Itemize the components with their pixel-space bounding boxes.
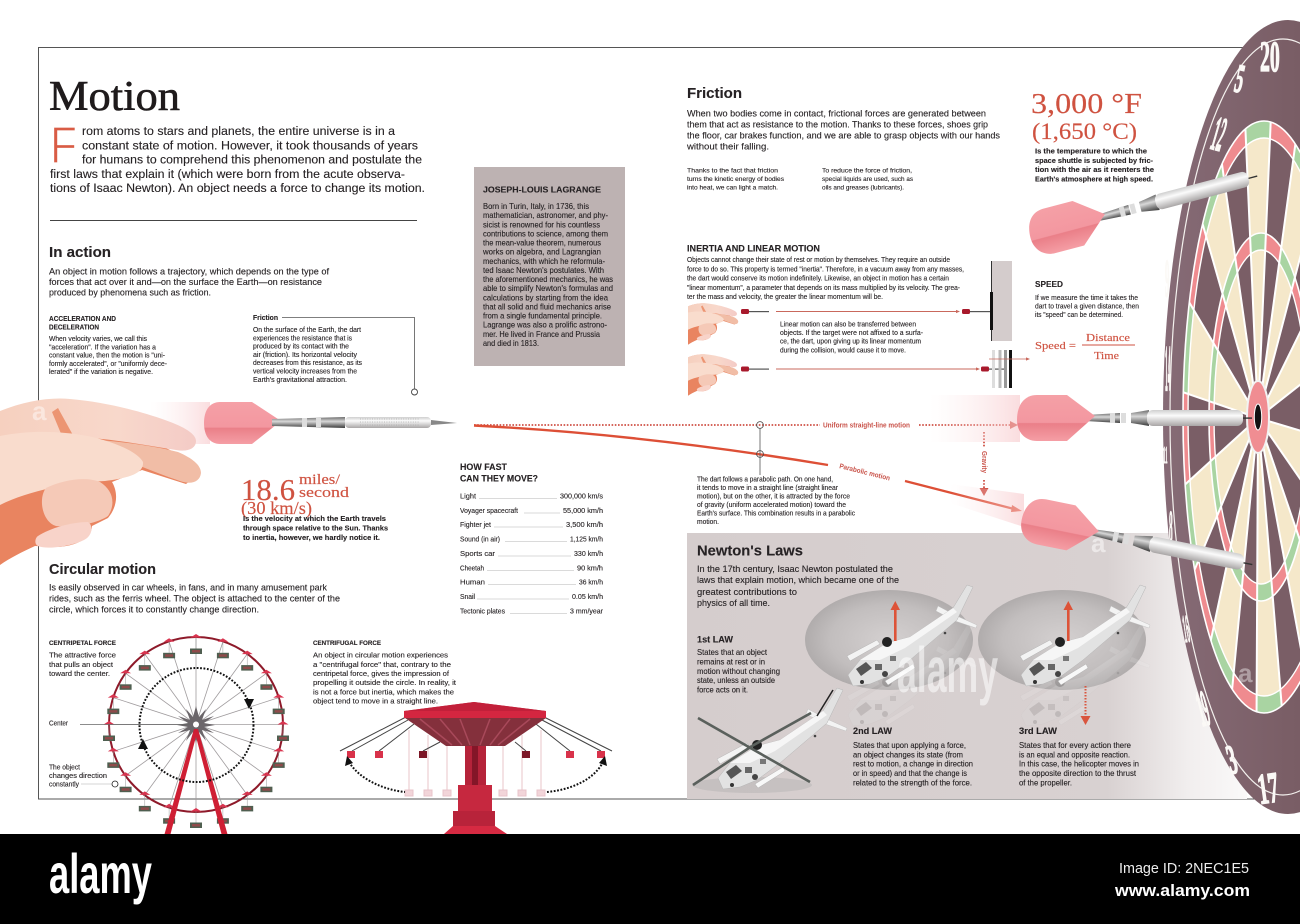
helicopter 1st law [692, 688, 847, 793]
block: acceleration: ACCELERATION AND [49, 316, 116, 323]
block: speed: If we measure the time it takes the [1035, 293, 1138, 302]
text: linear motion transfer: during the collision, would cause it to move. [780, 346, 906, 354]
3rd law text: States that for every action there [1019, 741, 1132, 750]
board numbers: 3 [1222, 736, 1241, 783]
block: friction callout: Friction [253, 315, 278, 322]
text: parabolic explanation: motion. [697, 517, 719, 526]
section: Inertia and linear motion: "linear momentum", a parameter that depends on its mass multiplied by its velocity. The grea- [687, 283, 960, 292]
leader line [282, 318, 414, 388]
wires [1184, 122, 1300, 712]
section: Friction: When two bodies come in contact, frictional forces are generated between [687, 108, 986, 120]
text: parabolic explanation: The dart follows a parabolic path. On one hand, [697, 474, 833, 484]
stat: Earth's velocity: second [299, 485, 350, 501]
stat: temperature: Is the temperature to which the [1035, 146, 1147, 156]
board numbers: 11 [1163, 441, 1168, 469]
text: centrifugal force: a "centrifugal force" that, contrary to the [313, 660, 451, 669]
block: friction callout: decreases from this resistance, as its [253, 358, 362, 367]
arrow: gravity [980, 432, 988, 496]
swing ride [340, 702, 612, 834]
panel: Joseph-Louis Lagrange: Born in Turin, Italy, in 1736, this [483, 202, 589, 211]
text: In action: An object in motion follows a trajectory, which depends on the type of [49, 266, 329, 278]
text: parabolic explanation: motion), but on the other, it is attracted by the force [697, 492, 850, 500]
panel: Newton's Laws [687, 533, 1247, 799]
label: object changes direction [49, 764, 118, 788]
panel: Joseph-Louis Lagrange: able to simplify Newton's formulas and [483, 284, 613, 293]
diagram: fixed target [688, 261, 1012, 345]
table: how fast can they move: 300,000 km/s [560, 492, 603, 500]
intro text: In the 17th century, Isaac Newton postulated the [697, 564, 893, 575]
panel: Joseph-Louis Lagrange: from a single fundamental principle. [483, 312, 602, 321]
text: centripetal force [49, 640, 117, 678]
stat: Earth's velocity: to inertia, however, we hardly notice it. [243, 533, 380, 542]
friction notes: turns the kinetic energy of bodies [687, 176, 785, 183]
1st law text: force acts on it. [697, 686, 748, 694]
stat: Earth's velocity: Is the velocity at which the Earth travels [243, 514, 386, 523]
section: Inertia and linear motion: force to do so. This property is termed "inertia". Therefore, in a vacuum away from any masses, [687, 264, 964, 274]
3rd law text: In this case, the helicopter moves in [1019, 760, 1139, 768]
panel: Joseph-Louis Lagrange: calculations by starting from the idea [483, 293, 609, 302]
cone under canopy [405, 718, 546, 746]
panel: Joseph-Louis Lagrange: mechanics, with which he reformula- [483, 257, 605, 266]
block: friction callout: vertical velocity increases from the [253, 366, 357, 376]
text: linear motion transfer: ce, the dart, upon giving up its linear momentum [780, 337, 921, 346]
friction notes: To reduce the force of friction, [822, 168, 912, 174]
2nd law text: or in speed) and that the change is [853, 769, 967, 778]
left dart with motion trail [150, 402, 457, 444]
block: speed: dart to travel a given distance, then [1035, 302, 1139, 310]
3rd law text: is an equal and opposite reaction. [1019, 750, 1130, 760]
alamy logo: alamy [49, 842, 152, 905]
stat: temperature [1031, 88, 1154, 184]
table: how fast can they move: CAN THEY MOVE? [460, 474, 538, 484]
watermark [32, 396, 1253, 706]
block: friction callout: produced by its contact with the [253, 342, 349, 351]
2nd law text [853, 726, 973, 788]
board numbers: 20 [1260, 34, 1280, 81]
text: centripetal force: CENTRIPETAL FORCE [49, 640, 117, 647]
table: how fast can they move: Sound (in air) [460, 534, 500, 544]
intro paragraph with drop cap: constant state of motion. However, it took thousands of years [82, 138, 418, 152]
website: www.alamy.com [1114, 881, 1250, 900]
block: friction callout: On the surface of the Earth, the dart [253, 325, 361, 334]
panel: Joseph-Louis Lagrange: sicist is renowned for his countless [483, 220, 600, 229]
table: how fast can they move: Fighter jet [460, 520, 491, 529]
motion trajectories [474, 421, 1022, 512]
block: speed: SPEED [1035, 279, 1063, 289]
section: Inertia and linear motion: Objects cannot change their state of rest or motion by themselves. They require an outside [687, 255, 950, 264]
block: friction callout: Earth's gravitational attraction. [253, 375, 347, 384]
stat: temperature: Earth's atmosphere at high speed. [1035, 174, 1153, 184]
board numbers: 5 [1231, 56, 1248, 102]
1st law text: motion without changing [697, 667, 780, 676]
board numbers: 12 [1206, 107, 1232, 162]
label: object changes direction: changes direction [49, 773, 107, 780]
stat: Earth's velocity: miles/ [299, 472, 341, 488]
intro paragraph with drop cap [50, 117, 425, 195]
formula: speed [1035, 332, 1135, 362]
label: center: Center [49, 720, 69, 728]
intro text: greatest contributions to [697, 587, 797, 598]
intro paragraph with drop cap: rom atoms to stars and planets, the entire universe is in a [82, 124, 395, 138]
block: friction callout: air (friction). Its horizontal velocity [253, 350, 357, 359]
rim [109, 637, 283, 812]
2nd law text: rest to motion, a change in direction [853, 760, 973, 768]
stat: Earth's velocity: through space relative to the Sun. Thanks [243, 524, 388, 532]
watermark: alamy [897, 634, 998, 706]
3rd law text: of the propeller. [1019, 778, 1072, 788]
friction notes: special liquids are used, such as [822, 176, 914, 183]
intro paragraph with drop cap: first laws that explain it (which were born from the acute observa- [50, 167, 405, 181]
text: parabolic explanation: of gravity (uniform accelerated motion) toward the [697, 500, 846, 509]
table: how fast can they move: Voyager spacecraft [460, 506, 518, 515]
panel: Joseph-Louis Lagrange [474, 167, 625, 366]
intro text: physics of all time. [697, 598, 770, 609]
board numbers: 9 [1165, 250, 1169, 309]
panel: Joseph-Louis Lagrange: mer. He lived in France and Prussia [483, 330, 600, 339]
1st law text: States that an object [697, 648, 768, 657]
stat: temperature: tion with the air as it reenters the [1035, 165, 1154, 174]
table: how fast can they move: 55,000 km/h [563, 506, 603, 515]
intro text: laws that explain motion, which became one of the [697, 575, 899, 586]
section: Friction: without their falling. [686, 142, 769, 152]
table: how fast can they move: 0.05 km/h [572, 592, 603, 601]
block: speed [1035, 279, 1139, 362]
seats [347, 751, 605, 758]
arrow: thrust up [1064, 601, 1073, 641]
helicopter 2nd law [805, 585, 977, 726]
text: centrifugal force: is not a force but inertia, which makes the [313, 688, 454, 696]
stat: temperature: (1,650 °C) [1032, 119, 1137, 144]
parabolic line [474, 426, 828, 465]
section: Inertia and linear motion: ter the mass and velocity, the greater the linear momentum will be. [687, 292, 883, 301]
section: Inertia and linear motion: INERTIA AND LINEAR MOTION [687, 244, 820, 254]
friction notes: oils and greases (lubricants). [822, 184, 904, 192]
block: acceleration: "acceleration". If the variation has a [49, 342, 156, 351]
bull [1247, 381, 1269, 453]
board numbers [1163, 34, 1282, 814]
table: how fast can they move: HOW FAST [460, 462, 508, 472]
spokes [109, 638, 283, 812]
table: how fast can they move: Cheetah [460, 564, 484, 572]
ferris wheel [103, 634, 289, 836]
board numbers: 16 [1180, 608, 1192, 652]
dartboard [1160, 20, 1300, 814]
arrow: reaction down [1080, 686, 1090, 725]
text: In action [49, 266, 329, 298]
table: how fast can they move: 90 km/h [577, 564, 603, 572]
dotted circle with arrows [138, 668, 254, 782]
1st law text: remains at rest or in [697, 658, 765, 666]
section: Inertia and linear motion [687, 244, 1030, 396]
panel: Joseph-Louis Lagrange: contributions to science, among them [483, 229, 608, 238]
1st law text: 1st LAW [697, 634, 733, 646]
block: acceleration: When velocity varies, we call this [49, 334, 147, 343]
table: how fast can they move: Light [460, 492, 476, 500]
block: acceleration [49, 316, 168, 376]
hand throwing dart [0, 398, 201, 565]
marker line [757, 422, 763, 475]
heading: In action: In action [49, 244, 111, 261]
table: how fast can they move: Sports car [460, 549, 496, 558]
stat: temperature: space shuttle is subjected by fric- [1035, 156, 1154, 165]
panel background [687, 533, 1247, 799]
section: Friction: Friction [687, 85, 742, 102]
board numbers: 8 [1169, 502, 1173, 551]
dotted arc arrows [345, 756, 607, 792]
section: Circular motion: circle, which forces it to constantly change direction. [49, 604, 259, 616]
board numbers: 17 [1255, 764, 1282, 814]
watermark: a [1091, 528, 1106, 558]
legs [164, 729, 228, 836]
chains [340, 717, 612, 751]
section: Friction [686, 85, 1000, 192]
dart: lower with motion trail [950, 484, 1257, 587]
watermark: a [1238, 658, 1253, 688]
block: speed: its "speed" can be determined. [1035, 310, 1123, 319]
section: Circular motion: Circular motion [49, 561, 156, 578]
heading: Newton's Laws: Newton's Laws [697, 542, 803, 560]
tail rotor [817, 690, 833, 716]
treble ring [1210, 234, 1300, 600]
table: how fast can they move: 330 km/h [574, 549, 603, 558]
panel: Joseph-Louis Lagrange: ted Isaac Newton's postulates. With [483, 266, 604, 275]
double ring [1184, 122, 1300, 712]
2nd law text: States that upon applying a force, [853, 741, 966, 750]
panel: Joseph-Louis Lagrange: Lagrange was also a prolific astrono- [483, 321, 607, 330]
block: friction callout [253, 315, 418, 395]
straight line dotted [474, 424, 1011, 426]
image id: Image ID: 2NEC1E5 [1119, 860, 1249, 877]
section: In action [49, 244, 329, 298]
panel: Joseph-Louis Lagrange: mathematician, astronomer, and phy- [483, 211, 608, 220]
text: centripetal force: toward the center. [49, 669, 110, 678]
panel: Joseph-Louis Lagrange: the mean-value theorem, numerous [483, 238, 601, 248]
label: parabolic motion: Parabolic motion [839, 463, 891, 483]
dart: middle with motion trail [930, 395, 1252, 442]
cabins [103, 634, 289, 828]
block: friction callout: experiences the resistance that is [253, 333, 352, 342]
text: centrifugal force: object tend to move in a straight line. [313, 696, 438, 706]
text: centrifugal force: propelling it outside the circle. In reality, it [313, 678, 456, 687]
formula: speed: Distance [1086, 332, 1130, 344]
formula: speed: Time [1094, 350, 1119, 362]
text: In action: forces that act over it and—on the surface the Earth—on resistance [49, 277, 322, 288]
title: Motion [49, 74, 180, 120]
text: linear motion transfer: Linear motion can also be transferred between [780, 320, 916, 328]
section: Circular motion: Is easily observed in car wheels, in fans, and in many amusement park [49, 582, 327, 594]
table: how fast can they move: 1,125 km/h [570, 534, 603, 544]
text: centrifugal force: An object in circular motion experiences [313, 650, 448, 660]
outer frame [38, 48, 1278, 799]
label: object changes direction: The object [49, 764, 80, 772]
3rd law text: the opposite direction to the thrust [1019, 769, 1137, 778]
footer bar [0, 834, 1300, 924]
table: how fast can they move: Snail [460, 592, 475, 601]
panel: Joseph-Louis Lagrange: the aforementioned mechanics, he was [483, 275, 613, 284]
friction notes: into heat, we can light a match. [687, 184, 778, 192]
friction notes: Thanks to the fact that friction [687, 168, 778, 174]
board numbers: 14 [1165, 332, 1171, 404]
board numbers: 19 [1191, 681, 1214, 737]
block: acceleration: lerated" if the variation is negative. [49, 367, 153, 376]
text: centrifugal force: centripetal force, gives the impression of [313, 669, 450, 678]
2nd law text: 2nd LAW [853, 726, 892, 737]
block: acceleration: DECELERATION [49, 324, 99, 332]
2nd law text: an object changes its state (from [853, 750, 963, 760]
section: Friction: the floor, car brakes function, and we are able to grasp objects with our hands [687, 130, 1000, 142]
friction notes [687, 168, 914, 192]
rotor blades [693, 713, 811, 785]
section: Friction: them that act as resistance to the motion. Thanks to these forces, shoes grip [687, 120, 988, 130]
3rd law text: 3rd LAW [1019, 726, 1057, 737]
label: object changes direction: constantly [49, 782, 79, 788]
dart: upper [1024, 154, 1263, 258]
text: linear motion transfer [780, 320, 924, 354]
intro paragraph with drop cap: tions of Isaac Newton). An object needs a force to change its motion. [50, 181, 425, 195]
2nd law text: related to the strength of the force. [853, 778, 972, 788]
pale hanging swings [405, 730, 545, 796]
intro paragraph with drop cap: for humans to comprehend this phenomenon and postulate the [82, 153, 422, 167]
block: acceleration: formly accelerated", or "uniformly dece- [49, 359, 168, 368]
number ring [1170, 39, 1300, 795]
text: In action: produced by phenomena such as friction. [49, 288, 211, 298]
label: uniform straight-line motion: Uniform straight-line motion [823, 422, 910, 430]
arrow: thrust up [890, 601, 900, 641]
helicopter 3rd law [978, 585, 1150, 726]
formula: speed: Speed = [1035, 340, 1076, 352]
intro text [697, 564, 899, 609]
section: Circular motion [49, 561, 340, 616]
text: parabolic explanation [697, 474, 855, 526]
outer segments [1188, 138, 1300, 696]
3rd law text [1019, 726, 1139, 788]
text: centrifugal force: CENTRIFUGAL FORCE [313, 640, 382, 647]
table: how fast can they move: Tectonic plates [460, 606, 505, 616]
inner segments [1214, 250, 1300, 584]
panel: Joseph-Louis Lagrange: JOSEPH-LOUIS LAGRANGE [483, 184, 601, 194]
1st law text: state, unless an outside [697, 676, 776, 685]
text: linear motion transfer: objects. If the target were not affixed to a surfa- [780, 328, 924, 337]
section: Inertia and linear motion: the dart would conserve its motion indefinitely. Likewise, an object in motion has a certain [687, 274, 949, 283]
drop cap: F [50, 117, 77, 175]
stat: Earth's velocity: (30 km/s) [241, 498, 312, 518]
stat: Earth's velocity [241, 472, 388, 542]
section: Circular motion: rides, such as the ferris wheel. The object is attached to the center of the [49, 594, 340, 604]
label: gravity: Gravity [980, 451, 987, 473]
block: acceleration: constant value, then the motion is "uni- [49, 351, 166, 360]
panel: Joseph-Louis Lagrange: that all solid and fluid mechanics arise [483, 302, 612, 311]
stat: Earth's velocity: 18.6 [241, 472, 295, 507]
table: how fast can they move: 3,500 km/h [566, 520, 603, 529]
panel: Joseph-Louis Lagrange: and died in 1813. [483, 339, 539, 348]
column [444, 745, 507, 834]
watermark: a [32, 396, 47, 426]
text: parabolic explanation: Earth's surface. This combination results in a parabolic [697, 508, 855, 518]
text: centripetal force: The attractive force [49, 650, 116, 660]
text: centrifugal force [313, 640, 456, 706]
text: centripetal force: that pulls an object [49, 660, 113, 669]
stat: temperature: 3,000 °F [1031, 88, 1142, 120]
diagram: moving target [688, 350, 1030, 396]
table: how fast can they move [460, 462, 604, 616]
1st law text [697, 634, 780, 694]
text: parabolic explanation: it tends to move in a straight line (straight linear [697, 483, 839, 492]
panel: Joseph-Louis Lagrange: works on algebra, and Lagrangian [482, 248, 601, 257]
table: how fast can they move: 36 km/h [579, 578, 603, 586]
hub star [177, 706, 215, 743]
table: how fast can they move: 3 mm/year [570, 606, 604, 616]
canopy [404, 702, 546, 718]
table: how fast can they move: Human [460, 578, 485, 586]
